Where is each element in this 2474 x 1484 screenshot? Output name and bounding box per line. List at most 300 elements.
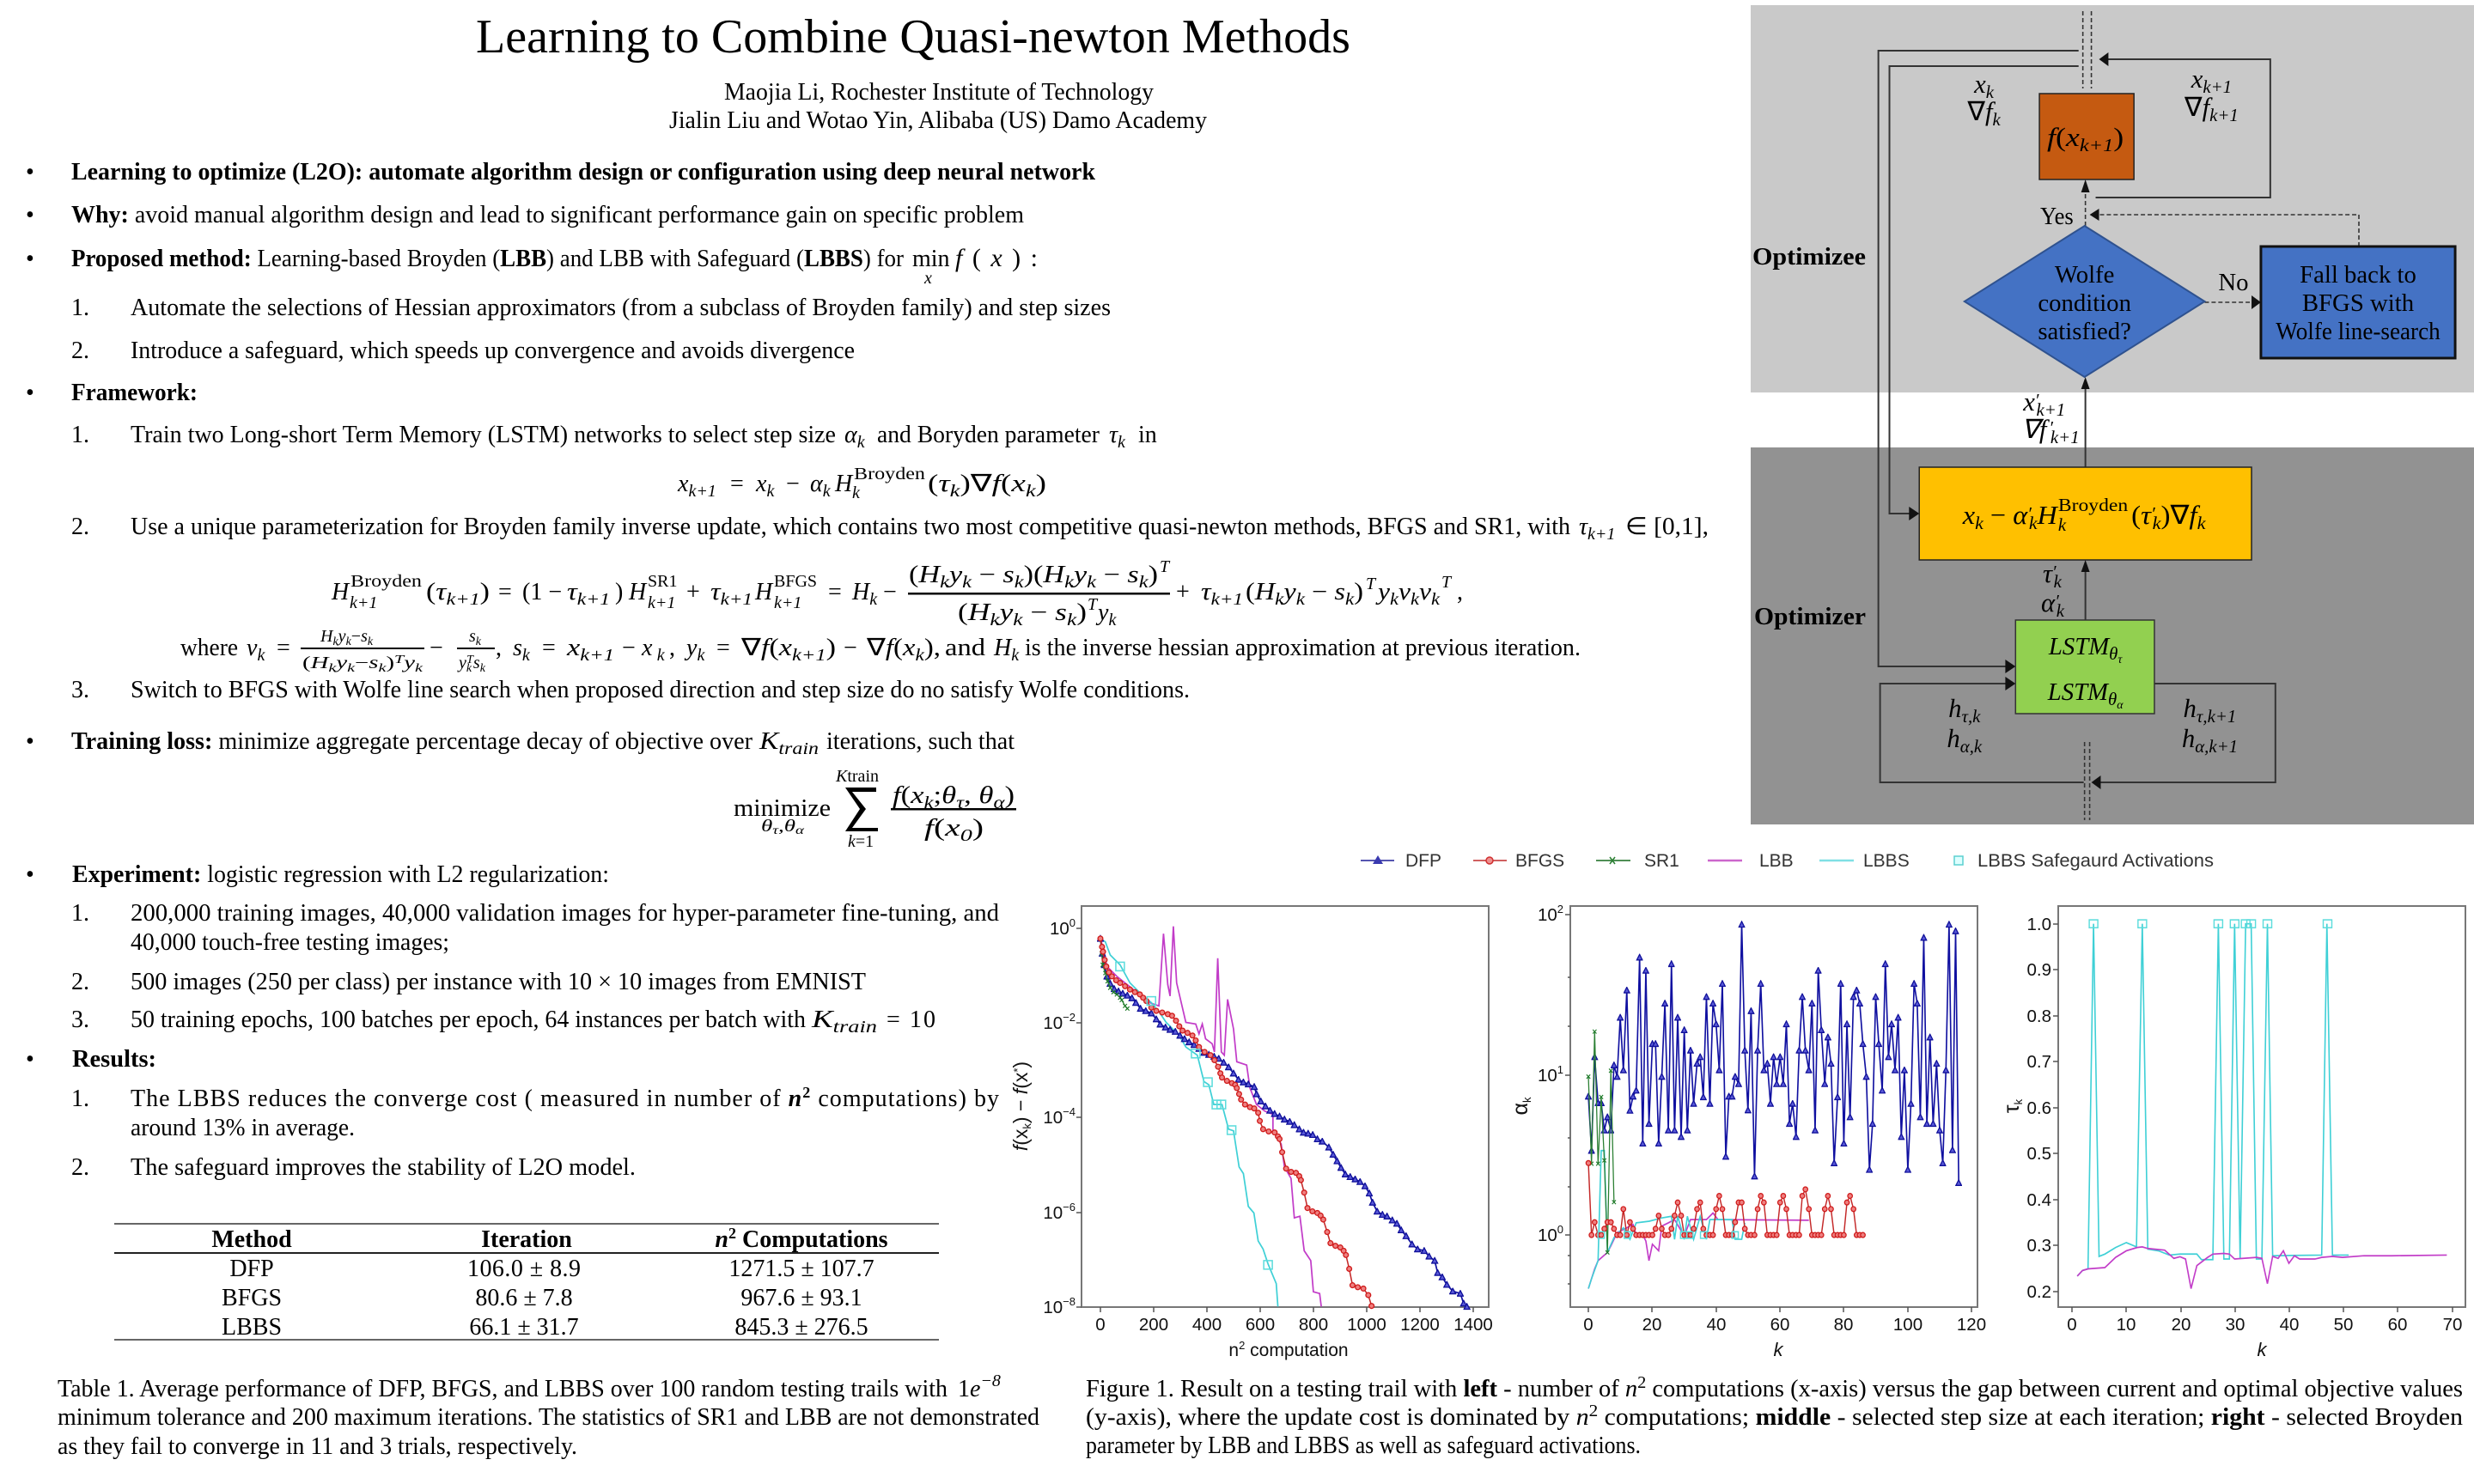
chart: step size per iteration: k bbox=[1773, 1339, 1783, 1360]
labels: candidate iterate: k+1 bbox=[2036, 399, 2065, 420]
labels: hidden states: h bbox=[2182, 723, 2195, 753]
equation: definitions of v, s, y: ) bbox=[826, 635, 836, 661]
text block: experiment: 40,000 touch-free testing images; bbox=[131, 929, 449, 956]
box: LSTM networks: τ bbox=[2118, 654, 2123, 666]
caption: table 1: Table 1. Average performance of DFP, BFGS, and LBBS over 100 random testing trails with bbox=[58, 1376, 948, 1402]
equation: definitions of v, s, y: H bbox=[994, 635, 1011, 661]
chart: Broyden parameter per iteration: 0 bbox=[2067, 1315, 2077, 1335]
equation: Broyden family update bbox=[331, 557, 1463, 629]
text block: framework: 2. bbox=[71, 514, 89, 540]
equation: definitions of v, s, y: k bbox=[1011, 646, 1020, 665]
chart legend: DFP bbox=[1405, 851, 1441, 871]
caption: figure 1: Figure 1. Result on a testing trail with left - number of n bbox=[1086, 1376, 1637, 1402]
box: LSTM networks: θ bbox=[2109, 643, 2118, 664]
equation: definitions of v, s, y: s bbox=[513, 635, 522, 661]
equation: Broyden family update: H bbox=[628, 579, 648, 605]
chart: objective gap vs n^2 computations: 2 bbox=[1239, 1339, 1245, 1352]
text block: training loss: iterations, such that bbox=[826, 728, 1015, 755]
chart: step size per iteration: 80 bbox=[1834, 1315, 1853, 1335]
equation: definitions of v, s, y: k bbox=[379, 662, 387, 675]
text block: introduction bullets: 2. bbox=[71, 338, 89, 364]
connectors bbox=[1879, 11, 2359, 820]
box: candidate update: ′ bbox=[2151, 503, 2155, 524]
box: fall back to BFGS: Wolfe line-search bbox=[2276, 318, 2440, 345]
chart: step size per iteration: 40 bbox=[1707, 1315, 1726, 1335]
equation: definitions of v, s, y: v bbox=[247, 635, 257, 661]
equation: definitions of v, s, y: where bbox=[180, 635, 238, 661]
table: method comparison: 80.6 ± 7.8 bbox=[475, 1285, 573, 1311]
table: method comparison bbox=[114, 1223, 939, 1341]
table: method comparison: 2 bbox=[728, 1225, 736, 1242]
equation: Broyden family update: k+1 bbox=[577, 590, 610, 609]
text block: results: 2 bbox=[802, 1084, 810, 1101]
chart: Broyden parameter per iteration: 0.9 bbox=[2027, 960, 2051, 980]
text block: introduction bullets: f ( x ): bbox=[955, 244, 1038, 272]
equation: Broyden family update: s bbox=[1127, 562, 1136, 588]
text block: introduction bullets: • bbox=[26, 159, 34, 186]
authors: Maojia Li, Rochester Institute of Technology bbox=[724, 79, 1154, 106]
table: method comparison: Iteration bbox=[481, 1226, 572, 1253]
equation: update rule: k bbox=[852, 484, 861, 502]
labels: next iterate: k+1 bbox=[2209, 105, 2239, 125]
chart: step size per iteration: α bbox=[1508, 1103, 1533, 1115]
chart: objective gap vs n^2 computations: n bbox=[1228, 1341, 1239, 1360]
box: candidate update: α bbox=[2013, 500, 2026, 530]
equation: Broyden family update: H bbox=[1043, 562, 1061, 588]
equation: definitions of v, s, y: ) bbox=[386, 654, 394, 672]
caption: figure 1: 2 bbox=[1637, 1373, 1646, 1392]
equation: update rule: k bbox=[950, 482, 961, 501]
box: candidate update: H bbox=[2037, 500, 2059, 530]
chart: step size per iteration: 10 bbox=[1538, 905, 1557, 925]
chart: Broyden parameter per iteration: k bbox=[2258, 1339, 2268, 1360]
labels: LSTM outputs: k bbox=[2054, 571, 2063, 592]
equation: Broyden family update: BFGS bbox=[774, 572, 817, 591]
chart: Broyden parameter per iteration: 40 bbox=[2280, 1315, 2299, 1335]
diamond: Wolfe condition: Wolfe bbox=[2055, 261, 2114, 289]
text block: framework: 1. bbox=[71, 422, 89, 448]
text block: framework: and Boryden parameter bbox=[877, 422, 1100, 448]
equation: Broyden family update: y bbox=[1098, 599, 1108, 626]
equation: update rule: H bbox=[834, 471, 854, 497]
caption: table 1: 1e bbox=[958, 1376, 980, 1402]
chart: objective gap vs n^2 computations: 0 bbox=[1069, 916, 1076, 929]
chart: Broyden parameter per iteration: k bbox=[2012, 1098, 2025, 1104]
box: candidate update bbox=[1919, 467, 2252, 560]
equation: definitions of v, s, y: ∇f(x bbox=[741, 635, 789, 661]
equation: definitions of v, s, y: s bbox=[473, 654, 480, 672]
chart: Broyden parameter per iteration: 0.2 bbox=[2027, 1282, 2051, 1302]
equation: Broyden family update: y bbox=[996, 599, 1014, 626]
equation: Broyden family update: H bbox=[754, 579, 774, 605]
box: candidate update: (τ bbox=[2131, 500, 2150, 530]
equation: Broyden family update: k+1 bbox=[774, 593, 801, 612]
equation: definitions of v, s, y: ∇f(x bbox=[867, 635, 913, 661]
box: candidate update: )∇ bbox=[2160, 500, 2190, 530]
text block: introduction bullets: Automate the selections of Hessian approximators (from a subclass of Broyden family) and step sizes bbox=[131, 295, 1111, 321]
equation: update rule: k bbox=[823, 482, 832, 501]
labels: LSTM outputs: ′ bbox=[2052, 562, 2057, 582]
chart: objective gap vs n^2 computations: 0 bbox=[1095, 1315, 1106, 1335]
equation: Broyden family update: y bbox=[1281, 579, 1296, 605]
chart: Broyden parameter per iteration: τ bbox=[2000, 1104, 2024, 1113]
text block: framework: k bbox=[1118, 433, 1126, 452]
equation: definitions of v, s, y: y bbox=[401, 654, 415, 672]
text block: framework: ∈ [0,1], bbox=[1625, 514, 1709, 540]
labels: current iterate: k bbox=[1986, 82, 1995, 102]
equation: Broyden family update: k bbox=[1108, 611, 1117, 629]
equation: definitions of v, s, y: k bbox=[476, 636, 482, 648]
labels: LSTM outputs: ′ bbox=[2055, 591, 2059, 611]
labels: candidate iterate: x bbox=[2023, 386, 2035, 417]
table: method comparison: DFP bbox=[229, 1256, 274, 1282]
text block: framework: α bbox=[844, 422, 857, 448]
diagram: flowchart bbox=[1879, 11, 2455, 820]
labels: hidden states: h bbox=[1948, 693, 1962, 723]
equation: Broyden family update: τ bbox=[710, 579, 719, 605]
chart legend: LBBS bbox=[1863, 851, 1910, 871]
labels: hidden states: α,k bbox=[1960, 736, 1983, 757]
equation: definitions of v, s, y: s bbox=[469, 627, 476, 646]
equation: training objective: k bbox=[924, 794, 935, 812]
equation: update rule: ) bbox=[1036, 471, 1046, 497]
caption: figure 1: parameter by LBB and LBBS as well as safeguard activations. bbox=[1086, 1432, 1641, 1459]
text block: framework: k+1 bbox=[1587, 525, 1615, 544]
text block: results: The safeguard improves the stability of L2O model. bbox=[131, 1154, 636, 1181]
equation: Broyden family update: = bbox=[828, 579, 842, 605]
labels: next iterate: k+1 bbox=[2203, 76, 2232, 97]
equation: Broyden family update: T bbox=[1366, 575, 1377, 593]
equation: definitions of v, s, y: y bbox=[459, 654, 466, 672]
text block: framework bbox=[26, 380, 1709, 703]
equation: update rule: k+1 bbox=[688, 482, 716, 501]
chart: objective gap vs n^2 computations: −6 bbox=[1063, 1201, 1076, 1213]
text block: introduction bullets: • bbox=[26, 202, 34, 228]
equation: training objective bbox=[734, 767, 1016, 851]
equation: definitions of v, s, y: ), bbox=[924, 635, 941, 661]
equation: definitions of v, s, y: is the inverse hessian approximation at previous iteration. bbox=[1025, 635, 1581, 661]
equation: training objective: ; bbox=[934, 782, 941, 809]
equation: Broyden family update: H bbox=[331, 579, 350, 605]
equation: training objective: k=1 bbox=[848, 832, 874, 851]
equation: training objective: 0 bbox=[960, 826, 972, 845]
equation: Broyden family update: k bbox=[1431, 590, 1441, 609]
chart: objective gap vs n^2 computations: computation bbox=[1245, 1341, 1349, 1360]
text block: experiment: 50 training epochs, 100 batches per epoch, 64 instances per batch with bbox=[131, 1007, 806, 1033]
equation: training objective: ) bbox=[972, 815, 984, 842]
box: candidate update: ′ bbox=[2027, 503, 2032, 524]
table: method comparison: 106.0 ± 8.9 bbox=[467, 1256, 581, 1282]
chart: objective gap vs n^2 computations: −8 bbox=[1063, 1295, 1076, 1308]
labels: current iterate bbox=[1966, 69, 2001, 130]
equation: definitions of v, s, y: = bbox=[277, 635, 290, 661]
chart: objective gap vs n^2 computations: 800 bbox=[1299, 1315, 1328, 1335]
equation: Broyden family update: Broyden bbox=[350, 572, 422, 591]
box: LSTM networks: α bbox=[2117, 699, 2124, 712]
equation: Broyden family update: y bbox=[1070, 562, 1088, 588]
equation: Broyden family update: k bbox=[1390, 590, 1399, 609]
chart legend: BFGS bbox=[1515, 851, 1564, 871]
labels: hidden states: h bbox=[2184, 693, 2197, 723]
box: fall back to BFGS: BFGS with bbox=[2302, 289, 2415, 317]
labels: LSTM outputs: k bbox=[2057, 600, 2065, 621]
equation: Broyden family update: T bbox=[1441, 573, 1453, 592]
text block: framework: in bbox=[1138, 422, 1157, 448]
equation: training objective: ,θ bbox=[778, 817, 795, 836]
table: method comparison: 967.6 ± 93.1 bbox=[740, 1285, 862, 1311]
text block: results: 1. bbox=[71, 1086, 89, 1112]
equation: definitions of v, s, y: k bbox=[415, 662, 424, 675]
text block: results: 2. bbox=[71, 1154, 89, 1181]
equation: update rule: = bbox=[730, 471, 744, 497]
box: LSTM networks bbox=[2015, 620, 2154, 714]
equation: Broyden family update: s bbox=[1334, 579, 1344, 605]
chart: Broyden parameter per iteration: 0.4 bbox=[2027, 1190, 2051, 1210]
equation: Broyden family update: (1 − bbox=[522, 579, 562, 605]
equation: training objective: f(x bbox=[924, 815, 956, 842]
box: objective evaluation: k+1 bbox=[2080, 135, 2113, 155]
chart: step size per iteration: k bbox=[1520, 1097, 1533, 1103]
equation: Broyden family update: (H bbox=[1246, 579, 1272, 605]
equation: training objective: minimize bbox=[734, 795, 831, 822]
chart legend: SR1 bbox=[1644, 851, 1679, 871]
equation: Broyden family update: k bbox=[1067, 611, 1078, 629]
chart legend: LBB bbox=[1759, 851, 1794, 871]
labels: next iterate: ∇f bbox=[2185, 92, 2209, 122]
box: LSTM networks: LSTM bbox=[2048, 678, 2108, 706]
label: yes: Yes bbox=[2040, 203, 2074, 230]
equation: Broyden family update: v bbox=[1398, 579, 1411, 605]
equation: definitions of v, s, y: k bbox=[328, 662, 337, 675]
chart: objective gap vs n^2 computations: ) − bbox=[1009, 1094, 1032, 1123]
text block: introduction bullets: Why: avoid manual algorithm design and lead to significant performance gain on specific problem bbox=[71, 202, 1024, 228]
authors: Jialin Liu and Wotao Yin, Alibaba (US) Damo Academy bbox=[669, 107, 1207, 134]
chart: step size per iteration: 100 bbox=[1893, 1315, 1923, 1335]
labels: LSTM outputs: α bbox=[2041, 587, 2055, 617]
equation: definitions of v, s, y: T bbox=[466, 654, 474, 666]
table: method comparison: n bbox=[715, 1226, 728, 1253]
equation: definitions of v, s, y: k bbox=[522, 646, 531, 665]
equation: Broyden family update: k bbox=[1013, 611, 1024, 629]
text block: framework: τ bbox=[1579, 514, 1587, 540]
table: method comparison: BFGS bbox=[222, 1285, 282, 1311]
chart: objective gap vs n^2 computations: k bbox=[1021, 1123, 1033, 1129]
labels: next iterate bbox=[2184, 64, 2239, 125]
text block: introduction bullets: min bbox=[912, 246, 950, 272]
equation: update rule bbox=[677, 465, 1046, 502]
equation: definitions of v, s, y: k bbox=[657, 646, 666, 665]
caption: figure 1: 2 bbox=[1589, 1402, 1598, 1420]
equation: Broyden family update: k bbox=[940, 573, 950, 592]
equation: Broyden family update: ) bbox=[1149, 562, 1158, 588]
chart: step size per iteration: 0 bbox=[1557, 1223, 1563, 1236]
text block: experiment: 500 images (250 per class) per instance with 10 × 10 images from EMNIST bbox=[131, 969, 866, 995]
labels: candidate iterate bbox=[2021, 386, 2080, 447]
chart: objective gap vs n^2 computations: ) bbox=[1009, 1061, 1032, 1068]
equation: definitions of v, s, y: k+1 bbox=[792, 646, 826, 665]
text block: results: • bbox=[26, 1046, 34, 1073]
equation: definitions of v, s, y: − bbox=[351, 627, 361, 646]
equation: definitions of v, s, y: − bbox=[430, 635, 443, 661]
labels: hidden states: τ,k bbox=[1962, 706, 1981, 727]
text block: experiment: 1. bbox=[71, 900, 89, 927]
chart: step size per iteration: 120 bbox=[1957, 1315, 1986, 1335]
equation: Broyden family update: ) bbox=[1354, 579, 1363, 605]
equation: training objective: θ bbox=[978, 782, 990, 809]
chart: objective gap vs n^2 computations: 10 bbox=[1043, 1298, 1063, 1317]
equation: Broyden family update: − bbox=[1305, 579, 1334, 605]
chart: objective gap vs n^2 computations bbox=[1009, 906, 1493, 1360]
table: method comparison: LBBS bbox=[222, 1314, 282, 1341]
equation: Broyden family update: k bbox=[1411, 590, 1420, 609]
equation: training objective: Ktrain bbox=[835, 767, 879, 786]
equation: Broyden family update: (H bbox=[958, 599, 985, 626]
equation: Broyden family update: y bbox=[1378, 579, 1388, 605]
chart: objective gap vs n^2 computations: 10 bbox=[1043, 1108, 1063, 1128]
equation: Broyden family update: τ bbox=[1201, 579, 1210, 605]
equation: Broyden family update: − bbox=[1096, 562, 1127, 588]
equation: Broyden family update: ) bbox=[480, 579, 490, 605]
chart: objective gap vs n^2 computations: −2 bbox=[1063, 1011, 1076, 1024]
equation: training objective: f(x bbox=[893, 782, 922, 809]
text block: introduction bullets: Introduce a safeguard, which speeds up convergence and avoids divergence bbox=[131, 338, 855, 364]
text block: training loss: K bbox=[759, 728, 776, 755]
labels: candidate iterate: ′ bbox=[2035, 390, 2039, 411]
diamond: Wolfe condition: condition bbox=[2038, 289, 2131, 317]
chart: objective gap vs n^2 computations: * bbox=[1011, 1068, 1024, 1073]
text block: framework: Use a unique parameterization for Broyden family inverse update, which contains two most competitive quasi-newton methods, BFGS and SR1, with bbox=[131, 514, 1570, 540]
equation: update rule: f(x bbox=[992, 471, 1022, 497]
equation: Broyden family update: T bbox=[1160, 557, 1171, 576]
chart: Broyden parameter per iteration: 60 bbox=[2388, 1315, 2407, 1335]
text block: experiment: Experiment: logistic regression with L2 regularization: bbox=[72, 861, 609, 888]
equation: update rule: α bbox=[810, 471, 823, 497]
equation: Broyden family update: k+1 bbox=[721, 590, 753, 609]
equation: definitions of v, s, y: − bbox=[622, 635, 636, 661]
equation: Broyden family update: k bbox=[1139, 573, 1149, 592]
text block: experiment: 3. bbox=[71, 1007, 89, 1033]
labels: hidden states: α,k+1 bbox=[2195, 736, 2238, 757]
chart: Broyden parameter per iteration: 70 bbox=[2443, 1315, 2462, 1335]
equation: Broyden family update: k bbox=[1087, 573, 1097, 592]
equation: Broyden family update: − bbox=[883, 579, 897, 605]
labels: candidate iterate: ∇f bbox=[2021, 414, 2046, 444]
chart: objective gap vs n^2 computations: f(x bbox=[1009, 1129, 1032, 1151]
equation: definitions of v, s, y: = bbox=[542, 635, 556, 661]
chart legend: LBBS Safegaurd Activations bbox=[1977, 851, 2214, 871]
equation: definitions of v, s, y: − bbox=[844, 635, 857, 661]
equation: training objective: α bbox=[795, 824, 805, 837]
chart: objective gap vs n^2 computations: 10 bbox=[1050, 919, 1069, 939]
equation: definitions of v, s, y: k bbox=[480, 662, 486, 675]
equation: definitions of v, s, y: H bbox=[320, 627, 332, 646]
chart: objective gap vs n^2 computations: 600 bbox=[1246, 1315, 1275, 1335]
labels: current iterate: x bbox=[1974, 69, 1986, 99]
text block: introduction bullets: Proposed method: Learning-based Broyden (LBB) and LBB with Safeguard (LBBS) for bbox=[71, 246, 905, 272]
chart: objective gap vs n^2 computations: 1200 bbox=[1400, 1315, 1440, 1335]
chart: Broyden parameter per iteration: 0.8 bbox=[2027, 1007, 2051, 1026]
chart: step size per iteration: 1 bbox=[1557, 1063, 1563, 1076]
labels: hidden states: τ,k+1 bbox=[2197, 706, 2236, 727]
equation: definitions of v, s, y: T bbox=[394, 654, 405, 666]
equation: training objective: ) bbox=[1004, 782, 1015, 809]
chart: Broyden parameter per iteration: 0.5 bbox=[2027, 1144, 2051, 1164]
equation: definitions of v, s, y: k bbox=[346, 636, 352, 648]
equation: update rule: (τ bbox=[928, 471, 947, 497]
text block: framework: • bbox=[26, 380, 34, 406]
equation: Broyden family update: y bbox=[946, 562, 963, 588]
caption: table 1: −8 bbox=[980, 1371, 1001, 1390]
authors bbox=[669, 79, 1207, 134]
labels: LSTM outputs: τ bbox=[2043, 558, 2052, 588]
equation: Broyden family update: s bbox=[1055, 599, 1064, 626]
table: method comparison: 845.3 ± 276.5 bbox=[734, 1314, 868, 1341]
equation: Broyden family update: k bbox=[869, 590, 878, 609]
text block: results: computations) by bbox=[811, 1086, 999, 1112]
equation: Broyden family update: T bbox=[1088, 595, 1099, 614]
chart: Broyden parameter per iteration: 10 bbox=[2117, 1315, 2136, 1335]
equation: training objective: , bbox=[964, 782, 972, 809]
box: objective evaluation: f(x bbox=[2047, 122, 2078, 152]
labels: LSTM outputs bbox=[2041, 558, 2065, 621]
chart: Broyden parameter per iteration bbox=[2000, 906, 2465, 1360]
table: method comparison: 1271.5 ± 107.7 bbox=[728, 1256, 874, 1282]
chart: Broyden parameter per iteration: 50 bbox=[2334, 1315, 2353, 1335]
equation: training objective: α bbox=[993, 794, 1005, 812]
equation: Broyden family update: k bbox=[990, 611, 1001, 629]
chart: step size per iteration: 2 bbox=[1557, 903, 1563, 915]
chart: objective gap vs n^2 computations: 10 bbox=[1043, 1013, 1063, 1033]
text block: framework: τ bbox=[1109, 422, 1118, 448]
panel: optimizee bbox=[1751, 5, 2474, 392]
equation: Broyden family update: SR1 bbox=[648, 572, 677, 591]
label: no: No bbox=[2218, 269, 2249, 296]
equation: definitions of v, s, y: , bbox=[496, 635, 502, 661]
box: LSTM networks: θ bbox=[2108, 689, 2117, 709]
equation: definitions of v, s, y: x bbox=[567, 635, 577, 661]
equation: update rule: x bbox=[678, 471, 688, 497]
chart: Broyden parameter per iteration: 0.7 bbox=[2027, 1052, 2051, 1072]
chart: Broyden parameter per iteration: 0.3 bbox=[2027, 1236, 2051, 1256]
box: candidate update: k bbox=[2058, 514, 2067, 535]
caption: table 1: minimum tolerance and 200 maximum iterations. The statistics of SR1 and LBB are not demonstrated bbox=[58, 1404, 1039, 1431]
equation: Broyden family update: − bbox=[972, 562, 1002, 588]
chart: Broyden parameter per iteration: 1.0 bbox=[2027, 915, 2051, 934]
text block: training loss: train bbox=[778, 739, 819, 758]
text block: training loss: Training loss: minimize aggregate percentage decay of objective over bbox=[71, 728, 753, 755]
box: objective evaluation bbox=[2039, 94, 2134, 179]
caption: figure 1 bbox=[1086, 1373, 2463, 1459]
box: candidate update: Broyden bbox=[2058, 495, 2129, 515]
box: candidate update: k bbox=[2197, 513, 2206, 533]
equation: Broyden family update: + bbox=[1176, 579, 1190, 605]
text block: results: The LBBS reduces the converge cost ( measured in number of n bbox=[131, 1086, 801, 1112]
text block: framework: Train two Long-short Term Memory (LSTM) networks to select step size bbox=[131, 422, 836, 448]
equation: Broyden family update: s bbox=[1002, 562, 1015, 588]
label: optimizee: Optimizee bbox=[1752, 244, 1866, 271]
diamond: Wolfe condition: satisfied? bbox=[2038, 318, 2131, 345]
equation: update rule: − bbox=[786, 471, 800, 497]
text block: results: around 13% in average. bbox=[131, 1115, 355, 1141]
equation: Broyden family update: (H bbox=[909, 562, 936, 588]
caption: table 1 bbox=[58, 1371, 1039, 1460]
chart: objective gap vs n^2 computations: 200 bbox=[1139, 1315, 1168, 1335]
table: method comparison: 66.1 ± 31.7 bbox=[469, 1314, 579, 1341]
equation: training objective: θ bbox=[941, 782, 954, 809]
chart: Broyden parameter per iteration: 20 bbox=[2172, 1315, 2191, 1335]
equation: update rule: )∇ bbox=[960, 471, 992, 497]
labels: current iterate: k bbox=[1993, 109, 2001, 130]
